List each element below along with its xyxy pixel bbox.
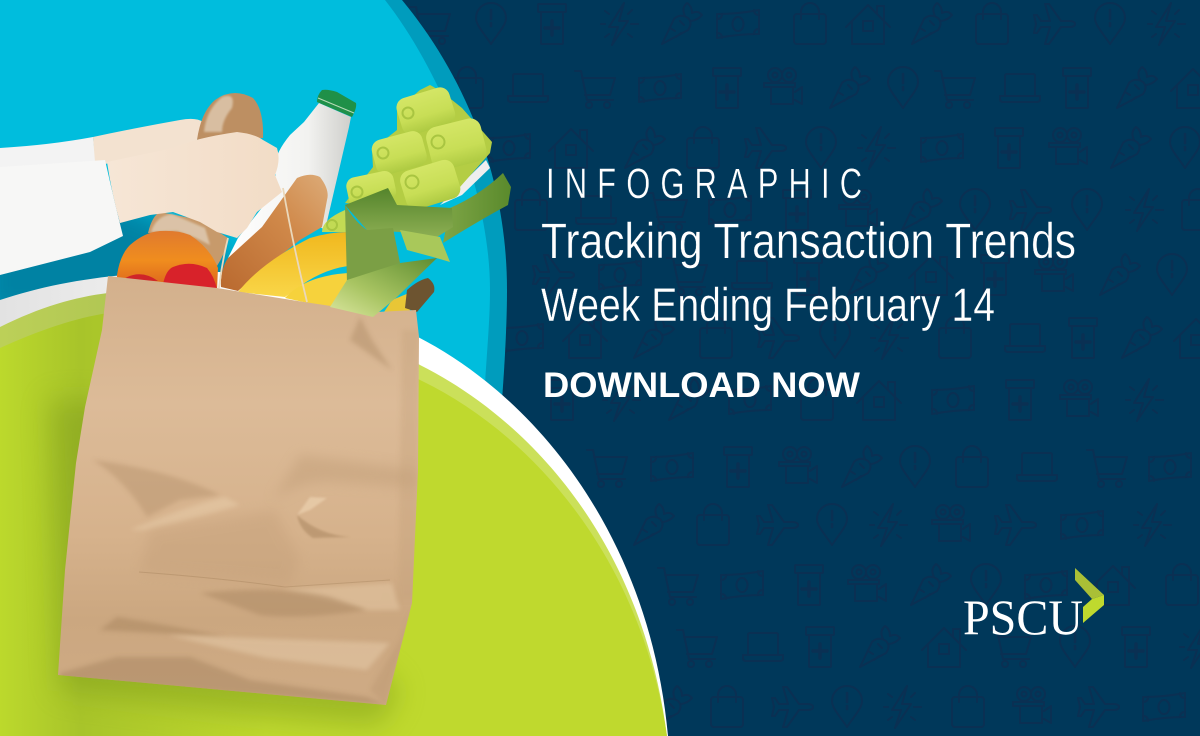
milk bottle — [228, 90, 356, 258]
lime green arc — [0, 310, 667, 736]
light green arc — [0, 291, 667, 736]
back arm — [93, 119, 203, 164]
bread loaf top — [197, 93, 263, 140]
bag drop shadow — [50, 400, 400, 725]
background icon pattern — [410, 3, 1200, 728]
baguette — [221, 175, 328, 291]
back sleeve — [0, 137, 96, 175]
tomato — [163, 264, 217, 289]
heading: Infographic: INFOGRAPHIC — [546, 159, 862, 207]
leek — [330, 173, 511, 317]
dark teal outer arc — [0, 0, 507, 400]
bananas — [238, 232, 434, 312]
groceries — [0, 85, 492, 312]
cyan arc panel — [0, 0, 490, 400]
PSCU logo — [963, 568, 1104, 645]
call to action: Download now: DOWNLOAD NOW — [543, 366, 860, 405]
heading: Tracking Transaction Trends: Tracking Transaction Trends — [541, 213, 1076, 269]
heading: Week Ending February 14: Week Ending February 14 — [541, 278, 995, 331]
white arc — [0, 272, 668, 736]
PSCU logo: PSCU — [963, 589, 1083, 645]
shadow under arm — [0, 212, 236, 300]
egg carton — [322, 85, 492, 232]
peach — [117, 231, 218, 290]
small tomato — [122, 274, 158, 281]
front sleeve — [0, 160, 123, 275]
bag strings — [219, 188, 307, 302]
bread loaf lower — [148, 212, 228, 266]
paper bag — [58, 276, 419, 705]
front hand — [107, 132, 282, 238]
